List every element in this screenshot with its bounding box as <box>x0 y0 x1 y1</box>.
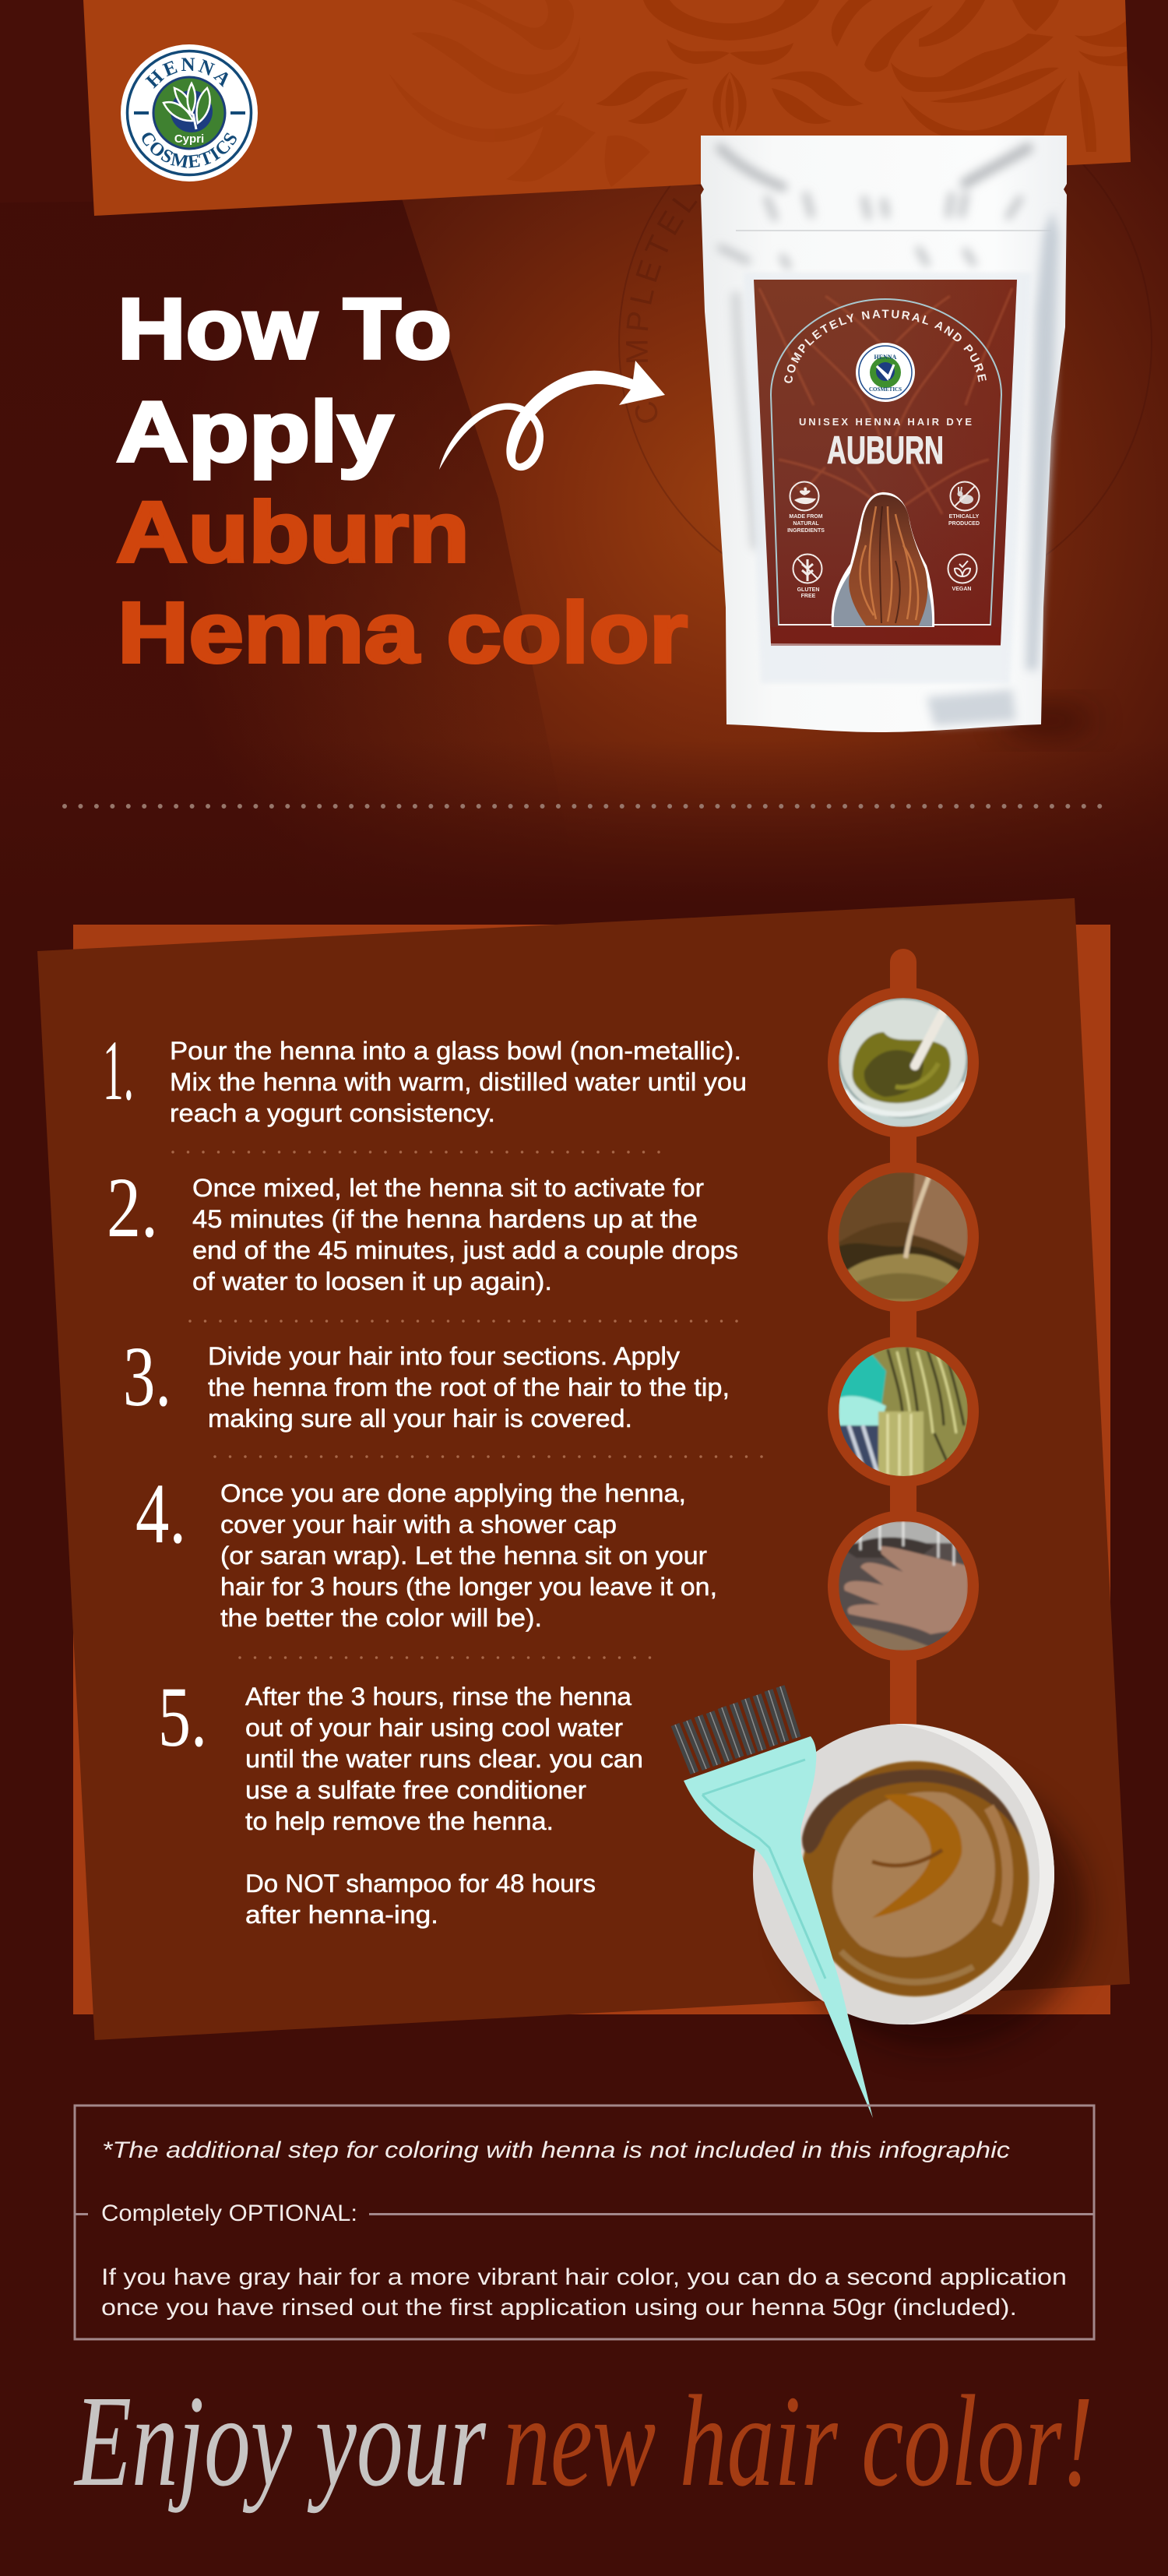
icon captions: ETHICALLY <box>949 514 980 520</box>
step 3 text: Divide your hair into four sections. Apply <box>208 1342 680 1370</box>
product pouch <box>701 136 1092 745</box>
arched text: COMPLETELY NATURAL AND PURE <box>784 310 987 383</box>
hero background glow <box>0 0 1168 904</box>
title: Auburn <box>116 485 470 580</box>
faint circle outline behind pouch <box>619 76 1152 609</box>
handle <box>684 1736 873 2118</box>
optional text: once you have rinsed out the first application using our henna 50gr (included). <box>101 2295 1017 2321</box>
closing headline <box>74 2369 1093 2514</box>
step 5 text: to help remove the henna. <box>245 1807 554 1835</box>
step 4 text: (or saran wrap). Let the henna sit on your <box>220 1542 707 1570</box>
step 2 text <box>192 1174 738 1295</box>
note text: *The additional step for coloring with henna is not included in this infographic <box>102 2137 1010 2163</box>
numeral 4: 4. <box>135 1466 186 1561</box>
henna paste <box>801 1761 1029 1996</box>
numeral 2: 2. <box>107 1160 158 1255</box>
step 1 text: Mix the henna with warm, distilled water until you <box>170 1068 747 1096</box>
steps panel: back orange sheet <box>73 925 1110 2014</box>
step 4 text <box>220 1479 717 1632</box>
step 3 text: making sure all your hair is covered. <box>208 1404 632 1432</box>
step 2 <box>107 1160 738 1295</box>
mini logo <box>856 343 915 402</box>
optional text: If you have gray hair for a more vibrant hair color, you can do a second application <box>101 2264 1067 2290</box>
title: How To <box>118 281 452 377</box>
icon captions: PRODUCED <box>948 521 980 527</box>
icon captions: VEGAN <box>952 587 971 592</box>
logo: Henna Cosmetics badge <box>121 44 258 181</box>
label hair strands <box>759 288 1012 514</box>
bristles <box>675 1686 797 1773</box>
photo 1: henna paste in a glass bowl <box>839 998 968 1127</box>
numeral 3: 3. <box>123 1329 171 1424</box>
step 1 text: Pour the henna into a glass bowl (non-metallic). <box>170 1037 741 1065</box>
inner panel around the label <box>744 273 1032 683</box>
step 2 text: end of the 45 minutes, just add a couple drops <box>192 1236 738 1264</box>
step 5 text: out of your hair using cool water <box>245 1714 623 1742</box>
mini logo: HENNA <box>874 354 897 361</box>
step 5 text: use a sulfate free conditioner <box>245 1776 586 1804</box>
henna bowl <box>753 1724 1086 2049</box>
numeral 5: 5. <box>158 1669 207 1764</box>
label arch frame <box>771 299 1001 625</box>
arrow: curly pointer to the pouch <box>439 361 665 470</box>
icon: vegan <box>948 555 976 583</box>
icon captions: GLUTEN <box>797 587 819 593</box>
logo: Henna Cosmetics badge: HENNA <box>145 58 228 89</box>
step 5 text <box>245 1683 643 1929</box>
icon captions: FREE <box>801 594 816 599</box>
note box <box>75 2106 1094 2339</box>
right side shaded gusset <box>1026 210 1059 670</box>
steps panel: front brown sheet <box>37 898 1130 2040</box>
white bowl <box>753 1724 1054 2025</box>
title: Henna color <box>118 585 688 681</box>
step 1 text <box>170 1037 747 1127</box>
dotted divider <box>65 804 1106 809</box>
icon: gluten free <box>793 555 822 583</box>
title: Apply <box>116 384 393 480</box>
step 5 text: until the water runs clear. you can <box>245 1745 643 1773</box>
woman seen from behind <box>832 492 934 627</box>
photo 4: hand rinsing hair under water <box>839 1521 968 1651</box>
step 4 text: the better the color will be). <box>220 1604 542 1632</box>
box outline <box>75 2106 1094 2339</box>
optional heading: Completely OPTIONAL: <box>101 2201 357 2226</box>
faint circular background lettering: COMPLETELY <box>626 184 704 423</box>
step 5 text: Do NOT shampoo for 48 hours <box>245 1869 596 1898</box>
step 2 text: Once mixed, let the henna sit to activate for <box>192 1174 704 1202</box>
closing headline: Enjoy your <box>74 2369 486 2514</box>
mini logo: COSMETICS <box>869 386 902 393</box>
logo: Henna Cosmetics badge: COSMETICS <box>142 132 237 168</box>
icon: natural ingredients <box>790 481 819 511</box>
pouch body <box>701 136 1067 732</box>
pouch shadow <box>1001 705 1094 736</box>
step 2 text: of water to loosen it up again). <box>192 1267 552 1295</box>
step 4 <box>135 1466 717 1632</box>
label subtitle: UNISEX HENNA HAIR DYE <box>799 416 972 428</box>
top banner with henna pattern <box>83 0 1131 216</box>
title <box>116 281 688 681</box>
optional text <box>101 2264 1067 2321</box>
icon captions: INGREDIENTS <box>787 528 825 534</box>
photo 2: water poured onto henna powder <box>839 1172 968 1302</box>
icon: cruelty free rabbit <box>950 481 980 511</box>
photo 3: henna applied to hair with gloved hand <box>839 1347 968 1480</box>
bowl shadow <box>790 1776 1086 2049</box>
logo: Henna Cosmetics badge: Cypri <box>174 132 204 146</box>
step 4 text: cover your hair with a shower cap <box>220 1510 617 1538</box>
icon captions: NATURAL <box>793 521 819 527</box>
step 3 <box>123 1329 730 1432</box>
step 5 text: After the 3 hours, rinse the henna <box>245 1683 631 1711</box>
icon captions <box>787 514 980 599</box>
step 2 text: 45 minutes (if the henna hardens up at the <box>192 1205 698 1233</box>
timeline bar and photo rings <box>828 949 979 1743</box>
icon captions: MADE FROM <box>789 514 823 520</box>
pouch label <box>754 280 1017 646</box>
step 1: 1. <box>103 1023 134 1118</box>
step 5 <box>158 1669 643 1929</box>
label product name: AUBURN <box>827 428 944 472</box>
step 1 text: reach a yogurt consistency. <box>170 1099 495 1127</box>
step 4 text: hair for 3 hours (the longer you leave it on, <box>220 1573 717 1601</box>
lower shaded fold <box>927 689 1016 726</box>
step 3 text <box>208 1342 730 1432</box>
step 4 text: Once you are done applying the henna, <box>220 1479 686 1507</box>
step 3 text: the henna from the root of the hair to the tip, <box>208 1373 730 1401</box>
tint brush <box>675 1686 873 2118</box>
step 5 text: after henna-ing. <box>245 1901 438 1929</box>
pouch wrinkles and panels <box>720 148 1059 726</box>
step 1 <box>103 1023 747 1127</box>
